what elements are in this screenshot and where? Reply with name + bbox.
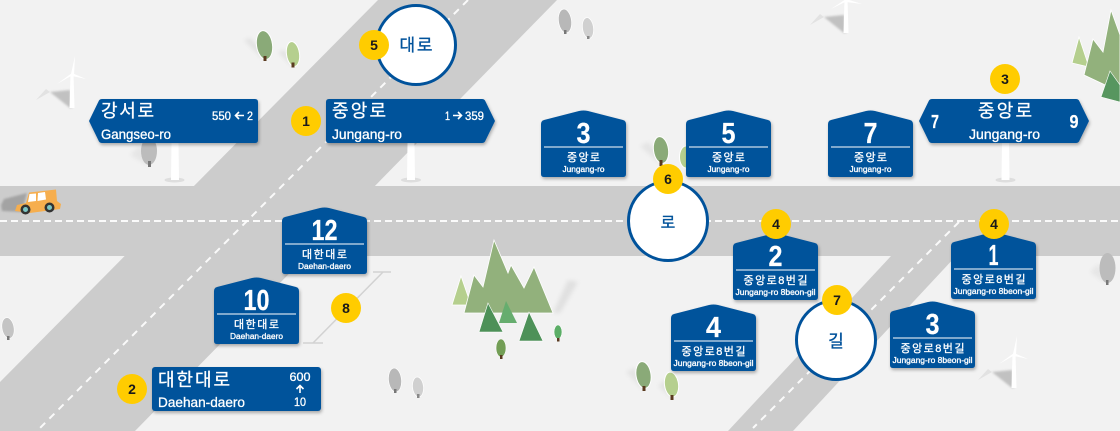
sign: Daehan-daero: 600 [290,370,311,384]
house sign: 1 Jungang-ro 8beon-gil: Jungang-ro 8beon-gil [954,287,1034,296]
badge 8: 8 [342,300,350,316]
icon: wind turbine top [810,0,862,33]
sign: Gangseo-ro [89,99,258,143]
house sign: 3 Jungang-ro: 중앙로 [567,151,600,164]
badge 1: 1 [302,113,310,129]
house sign: 12 Daehan-daero: 대한대로 [302,248,347,261]
sign: Jungang-ro both ways: 7 [931,112,939,132]
trees: bottom green [626,361,680,400]
house sign: 5 Jungang-ro [686,110,771,177]
sign: Gangseo-ro: 2 [247,109,253,123]
house sign: 7 Jungang-ro: 7 [864,118,878,150]
trees: centre green [640,136,692,168]
badge 7: 7 [833,292,841,308]
house sign: 3 Jungang-ro 8beon-gil [890,302,975,368]
width marker lines [303,272,391,343]
sign: Daehan-daero: 대한대로 [158,370,230,390]
sign: Daehan-daero: Daehan-daero [158,394,245,410]
house sign: 1 Jungang-ro 8beon-gil: 중앙로8번길 [962,273,1026,286]
sign: Daehan-daero [152,367,321,411]
house sign: 12 Daehan-daero: Daehan-daero [298,262,352,271]
badge 2: 2 [128,381,136,397]
badge 5: 5 [370,37,378,53]
badge 6: 6 [664,171,672,187]
house sign: 1 Jungang-ro 8beon-gil [951,232,1036,299]
house sign: 2 Jungang-ro 8beon-gil [733,234,818,300]
house sign: 2 Jungang-ro 8beon-gil: Jungang-ro 8beon-gil [736,288,816,297]
sign: Jungang-ro one way: 중앙로 [332,101,386,121]
badge 1 [291,106,321,136]
house sign: 3 Jungang-ro [541,110,626,177]
sign: Jungang-ro one way: 1 [445,109,450,123]
sign: Jungang-ro one way: Jungang-ro [332,126,402,142]
circle label: 길: 길 [828,332,844,351]
house sign: 4 Jungang-ro 8beon-gil: Jungang-ro 8beon-gil [674,359,754,368]
badge 8 [331,293,361,323]
tree: grey far left [0,317,16,340]
house sign: 4 Jungang-ro 8beon-gil: 4 [706,312,721,344]
badge 4 right [979,209,1009,239]
circle label: 로 [628,182,708,260]
icon: car [1,190,61,214]
icon: wind turbine left [36,56,86,108]
forest: top right [1072,10,1120,102]
badge 2 [117,374,147,404]
badge 4 left: 4 [772,216,780,232]
trees: bottom grey [387,367,425,398]
circle label: 길 [796,300,876,380]
house sign: 2 Jungang-ro 8beon-gil: 중앙로8번길 [744,274,808,287]
sign: Jungang-ro both ways: 중앙로 [978,101,1032,121]
sign: Jungang-ro one way [326,99,495,143]
circle label: 로: 로 [661,215,675,232]
house sign: 5 Jungang-ro: Jungang-ro [708,165,750,174]
house sign: 4 Jungang-ro 8beon-gil [671,304,756,371]
sign: Daehan-daero: 10 [294,395,306,409]
badge 4 right: 4 [990,216,998,232]
badge 5 [359,30,389,60]
house sign: 10 Daehan-daero [214,278,299,344]
tree: grey under Gangseo sign [130,137,157,167]
badge 4 left [761,209,791,239]
forest: centre [452,240,578,359]
sign: Jungang-ro both ways [919,99,1089,143]
house sign: 10 Daehan-daero: Daehan-daero [230,332,284,341]
house sign: 7 Jungang-ro: 중앙로 [854,151,887,164]
house sign: 3 Jungang-ro: Jungang-ro [562,165,605,174]
sign post: Gangseo-ro [164,143,184,182]
house sign: 10 Daehan-daero: 10 [244,285,270,317]
house sign: 3 Jungang-ro 8beon-gil: 중앙로8번길 [900,342,964,355]
trees: top grey [557,8,595,39]
house sign: 3 Jungang-ro 8beon-gil: 3 [926,309,940,341]
sign post: Jungang-ro both ways [996,143,1016,182]
circle label: 대로 [376,6,456,84]
house sign: 12 Daehan-daero [282,208,367,274]
sign: Gangseo-ro: 550 [212,109,231,123]
tree: grey far right [1090,253,1116,285]
sign: Jungang-ro both ways: 9 [1070,112,1078,132]
house sign: 2 Jungang-ro 8beon-gil: 2 [768,241,782,273]
sign: Gangseo-ro: Gangseo-ro [101,126,171,142]
badge 6 [653,164,683,194]
house sign: 10 Daehan-daero: 대한대로 [234,318,279,331]
sign: Gangseo-ro: 강서로 [101,101,154,121]
house sign: 4 Jungang-ro 8beon-gil: 중앙로8번길 [682,345,746,358]
circle label: 대로: 대로 [400,36,432,55]
badge 7 [822,285,852,315]
badge 3 [990,64,1020,94]
sign: Jungang-ro both ways: Jungang-ro [969,126,1040,142]
house sign: 1 Jungang-ro 8beon-gil: 1 [988,240,998,272]
sign: Jungang-ro one way: 359 [465,109,484,123]
house sign: 5 Jungang-ro: 중앙로 [712,151,745,164]
trees: top left green [244,30,301,68]
house sign: 7 Jungang-ro: Jungang-ro [850,165,892,174]
house sign: 3 Jungang-ro: 3 [576,118,590,150]
icon: wind turbine right [978,336,1028,388]
badge 3: 3 [1001,71,1009,87]
house sign: 5 Jungang-ro: 5 [722,118,736,150]
house sign: 3 Jungang-ro 8beon-gil: Jungang-ro 8beon-gil [892,356,973,365]
sign post: Jungang-ro [401,143,421,182]
house sign: 12 Daehan-daero: 12 [312,215,338,247]
house sign: 7 Jungang-ro [828,110,913,177]
